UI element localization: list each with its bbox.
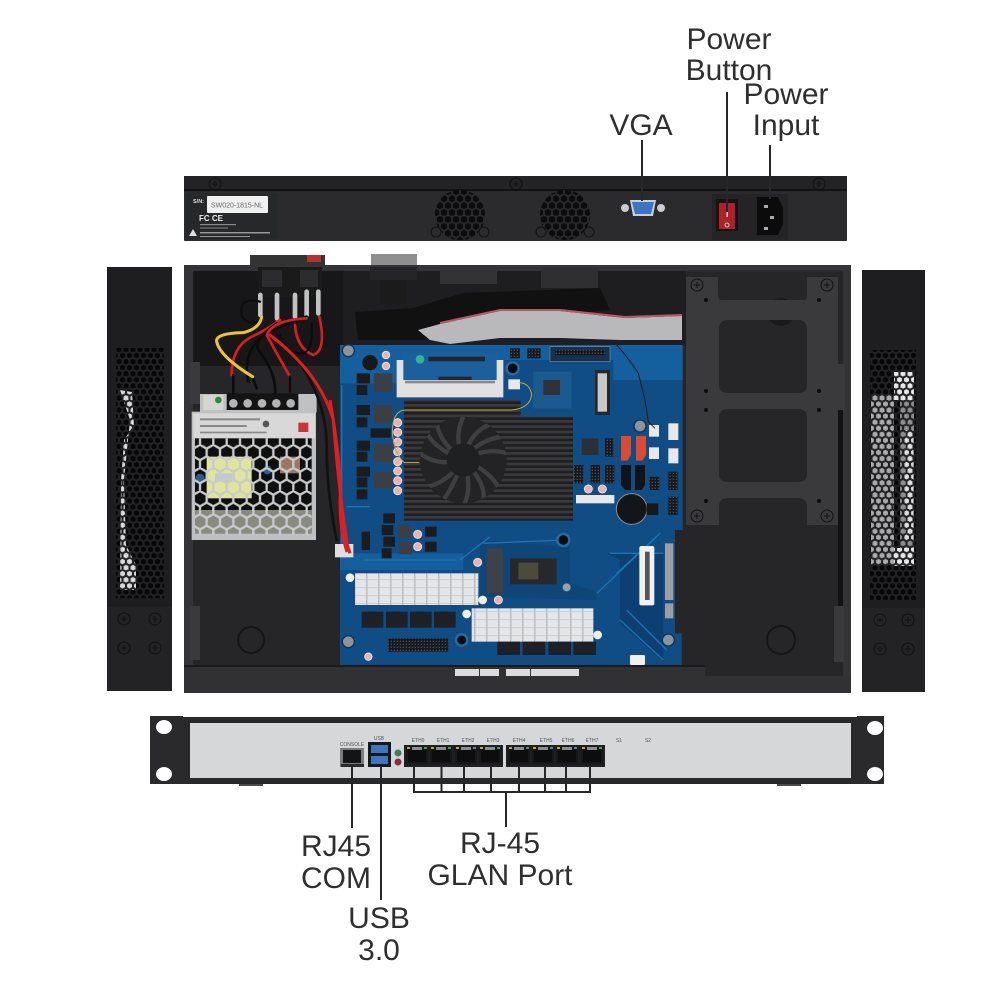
recess for power module (712, 194, 788, 240)
rear compliance label: S/N: (193, 199, 204, 205)
network heatsink 2 (462, 608, 602, 642)
panel: left side cover (107, 267, 172, 691)
floor circles (238, 626, 795, 654)
red SATA ports (621, 436, 646, 461)
network heatsink 1 (346, 573, 487, 605)
rack ears (150, 716, 884, 784)
LED indicators (394, 750, 402, 766)
top-protruding connectors (250, 254, 417, 266)
VGA connector (621, 200, 665, 216)
left side mesh (116, 348, 164, 598)
front lip of chassis (184, 665, 851, 693)
board power wire (330, 400, 347, 552)
rear vent right (536, 190, 594, 240)
side flanges (190, 362, 845, 662)
USB ports (368, 736, 391, 767)
panel: rear panel (184, 176, 847, 246)
panel: right side cover (862, 270, 925, 692)
port labels: ETH5 (540, 738, 553, 744)
label: Power Input: Input (753, 109, 820, 142)
PSU mesh view (195, 438, 312, 535)
label: Power Input: Power (743, 78, 829, 111)
PCB (340, 345, 683, 665)
faston tabs (260, 292, 318, 318)
chassis floor (193, 271, 843, 676)
black tape (355, 288, 610, 340)
rear compliance label: FC CE (199, 214, 224, 223)
ribbon cable (418, 310, 682, 344)
label: VGA: VGA (609, 109, 673, 142)
panel: open chassis (184, 254, 851, 693)
RJ45 port group 1 (404, 745, 503, 767)
label: RJ-45 GLAN Port: RJ-45 (460, 827, 540, 860)
label: RJ-45 GLAN Port: GLAN Port (427, 859, 573, 892)
port labels: S2 (645, 738, 651, 744)
CPU fan (420, 417, 507, 507)
port labels: ETH2 (462, 738, 475, 744)
label: Power Button (686, 23, 772, 87)
label: Power Input (743, 78, 829, 142)
expansion header (388, 638, 448, 652)
chassis shell (184, 265, 851, 693)
port labels: ETH0 (412, 738, 425, 744)
port labels (412, 738, 651, 744)
port labels: S1 (616, 738, 622, 744)
USB ports: USB (374, 736, 385, 742)
rear compliance label: SW020-1815-NL (211, 202, 263, 210)
silver faceplate (190, 723, 851, 778)
rubber feet (239, 784, 801, 786)
capacitors (365, 351, 606, 660)
label: RJ45 COM: RJ45 (301, 830, 371, 863)
PSU bracket and terminals (200, 393, 317, 412)
label: Power Button: Power (686, 23, 772, 56)
white connectors (576, 423, 678, 503)
rear internal connector blocks (258, 267, 598, 304)
pin headers (574, 438, 678, 515)
RJ45 port group 2 (506, 745, 605, 767)
port labels: ETH7 (586, 738, 599, 744)
console port: CONSOLE (340, 742, 365, 748)
fan wire (392, 383, 532, 462)
panel: front panel (150, 716, 884, 786)
CPU heatsink (404, 400, 573, 521)
leader lines: front (352, 766, 591, 900)
right side mesh (870, 350, 916, 600)
port labels: ETH3 (487, 738, 500, 744)
label: USB 3.0 (348, 902, 410, 967)
power supply (192, 393, 317, 540)
port labels: ETH6 (562, 738, 575, 744)
mounting screws (342, 345, 674, 648)
coin battery (616, 494, 658, 524)
label: USB 3.0: USB (348, 902, 410, 935)
rear compliance label (186, 193, 277, 239)
label: Power Button: Button (686, 54, 772, 87)
rear vent left (430, 190, 490, 240)
leader lines: rear (642, 92, 770, 212)
label: RJ45 COM (301, 830, 371, 895)
power wiring (217, 292, 350, 553)
label: RJ45 COM: COM (301, 862, 371, 895)
board traces (342, 385, 667, 660)
main board (335, 345, 683, 665)
memory socket (397, 353, 520, 397)
controller chip area (510, 347, 610, 455)
drive bracket (686, 277, 838, 525)
label: USB 3.0: 3.0 (358, 934, 400, 967)
black SATA ports (621, 465, 645, 490)
voltage regulators (357, 373, 437, 558)
power input connector on board (335, 544, 353, 557)
port labels: ETH1 (437, 738, 450, 744)
power switch (716, 199, 738, 231)
M.2 socket and SIM slot (487, 548, 571, 593)
console port (340, 742, 365, 767)
LAN transformers (362, 612, 596, 655)
power socket (757, 197, 783, 235)
port labels: ETH4 (513, 738, 526, 744)
barcode sticker (630, 543, 673, 665)
buzzer (362, 355, 378, 370)
PSU body (192, 412, 316, 540)
label: RJ-45 GLAN Port (427, 827, 573, 892)
